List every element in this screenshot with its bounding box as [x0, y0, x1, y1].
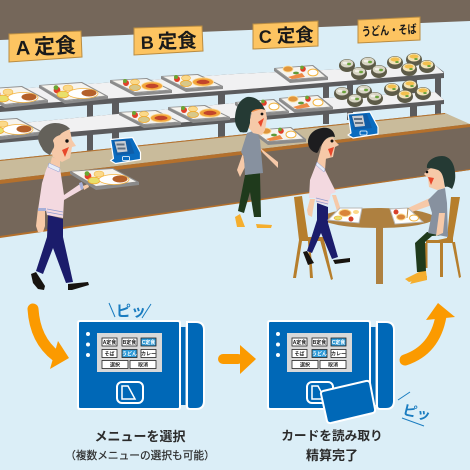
trays: B set: [110, 74, 230, 128]
person: seated at table: [405, 156, 455, 284]
touch screen: 取消: [328, 362, 338, 368]
touch screen: A定食: [293, 339, 306, 346]
tray on table, right: [390, 208, 423, 224]
touch screen: そば: [294, 350, 305, 358]
sign: A定食: [9, 31, 82, 62]
touch screen: 取消: [138, 362, 148, 368]
person: walking with tray: [31, 123, 89, 290]
beep text, second reader: [398, 392, 432, 426]
chair left: [293, 196, 333, 280]
carried tray, person 2: [252, 127, 306, 145]
caption: card reading: [281, 428, 383, 463]
caption: menu selection: [65, 429, 215, 462]
brown ceiling band: [0, 0, 470, 40]
table: [322, 208, 434, 284]
card slot icon: [117, 382, 143, 403]
caption: menu selection: メニューを選択: [94, 429, 186, 444]
touch screen: 選択: [300, 362, 310, 368]
touch screen: カレー: [141, 350, 156, 358]
person: walking past table: [303, 128, 350, 265]
trays: C set: [235, 65, 333, 117]
person: walking in grey shirt: [235, 97, 278, 228]
touch screen: [287, 333, 352, 372]
payment terminal: card reading: [268, 321, 394, 409]
arrow: up to table: [405, 303, 455, 360]
chair right: [425, 197, 461, 278]
sign: B定食: [134, 26, 203, 55]
caption: menu selection: （複数メニューの選択も可能）: [65, 449, 215, 462]
sign: うどん・そば: うどん・そば: [361, 21, 417, 39]
shelf unit: [0, 65, 444, 157]
sign: B定食: B定食: [140, 30, 198, 54]
touch screen: C定食: [142, 339, 155, 346]
counter: [0, 113, 470, 238]
touch screen: [97, 333, 162, 372]
IC card: [321, 381, 375, 423]
touch screen: B定食: [313, 339, 326, 346]
beep text, second reader: ピッ: [401, 401, 432, 424]
tray on table, left: [328, 208, 362, 223]
card reader on counter, left: [110, 138, 140, 164]
carried tray, person 1: [70, 168, 139, 190]
payment terminal: menu selection: [78, 321, 204, 409]
caption: card reading: 精算完了: [306, 448, 358, 463]
touch screen: 選択: [110, 362, 120, 368]
touch screen: うどん: [312, 350, 327, 358]
sign: C定食: C定食: [258, 24, 315, 47]
sign: うどん・そば: [358, 17, 420, 43]
touch screen: A定食: [103, 339, 116, 346]
bowls of noodles: [334, 53, 435, 107]
arrow: between readers: [218, 345, 256, 374]
caption: card reading: カードを読み取り: [281, 428, 383, 443]
trays: A set: [0, 82, 108, 140]
beep text, first reader: ピッ: [116, 303, 146, 320]
card slot icon: [307, 382, 333, 403]
touch screen: C定食: [332, 339, 345, 346]
arrow: down into first reader: [33, 309, 69, 369]
sign: A定食: A定食: [15, 34, 77, 60]
touch screen: カレー: [331, 350, 346, 358]
touch screen: そば: [104, 350, 115, 358]
touch screen: うどん: [122, 350, 137, 358]
card reader on counter, right: [348, 112, 378, 138]
touch screen: B定食: [123, 339, 136, 346]
